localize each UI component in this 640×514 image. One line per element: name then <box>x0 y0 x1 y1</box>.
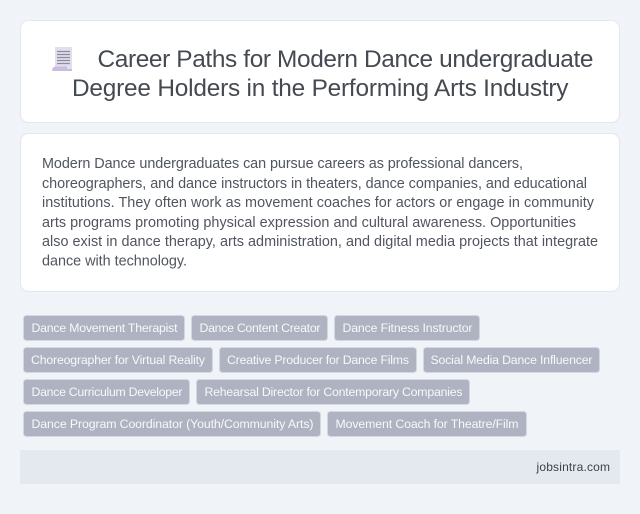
tag: Social Media Dance Influencer <box>424 348 600 372</box>
summary text block: dance with technology. <box>42 254 187 270</box>
tag: Dance Content Creator: Dance Content Creator <box>200 321 320 335</box>
tag: Dance Content Creator <box>192 316 328 340</box>
tag: Social Media Dance Influencer: Social Media Dance Influencer <box>430 353 592 367</box>
career tags <box>24 316 600 436</box>
summary text block <box>42 156 598 270</box>
tag: Creative Producer for Dance Films <box>220 348 416 372</box>
summary text block: Modern Dance undergraduates can pursue careers as professional dancers, <box>42 156 523 172</box>
tag: Creative Producer for Dance Films: Creative Producer for Dance Films <box>227 353 409 367</box>
tag: Dance Movement Therapist: Dance Movement Therapist <box>32 321 178 335</box>
summary text block: also exist in dance therapy, arts administration, and digital media projects that integrate <box>42 234 598 250</box>
footer source text: jobsintra.com <box>536 460 610 474</box>
icon: document scroll <box>52 47 72 71</box>
summary text block: arts programs promoting physical expression and cultural awareness. Opportunities <box>42 215 576 231</box>
tag: Movement Coach for Theatre/Film <box>328 412 526 436</box>
title: Degree Holders in the Performing Arts Industry <box>72 75 569 102</box>
summary text block: choreographers, and dance instructors in theaters, dance companies, and educational <box>42 176 587 192</box>
tag: Dance Curriculum Developer <box>24 380 190 404</box>
panel: summary <box>20 134 620 292</box>
panel: header <box>20 20 620 122</box>
tag: Choreographer for Virtual Reality <box>24 348 212 372</box>
tag: Dance Fitness Instructor: Dance Fitness Instructor <box>342 321 472 335</box>
tag: Choreographer for Virtual Reality: Choreographer for Virtual Reality <box>31 353 206 367</box>
footer bar <box>20 450 620 484</box>
tag: Dance Movement Therapist <box>24 316 184 340</box>
summary text block: institutions. They often work as movement coaches for actors or engage in community <box>42 195 595 211</box>
tag: Rehearsal Director for Contemporary Companies <box>196 380 470 404</box>
tag: Dance Curriculum Developer: Dance Curriculum Developer <box>32 385 182 399</box>
tag: Dance Fitness Instructor <box>334 316 480 340</box>
title: Career Paths for Modern Dance undergraduate <box>98 46 594 73</box>
title <box>72 46 594 102</box>
tag: Rehearsal Director for Contemporary Companies: Rehearsal Director for Contemporary Companies <box>204 385 462 399</box>
tag: Movement Coach for Theatre/Film: Movement Coach for Theatre/Film <box>336 417 518 431</box>
tag: Dance Program Coordinator (Youth/Community Arts) <box>24 412 320 436</box>
tag: Dance Program Coordinator (Youth/Community Arts): Dance Program Coordinator (Youth/Community Arts) <box>32 417 314 431</box>
